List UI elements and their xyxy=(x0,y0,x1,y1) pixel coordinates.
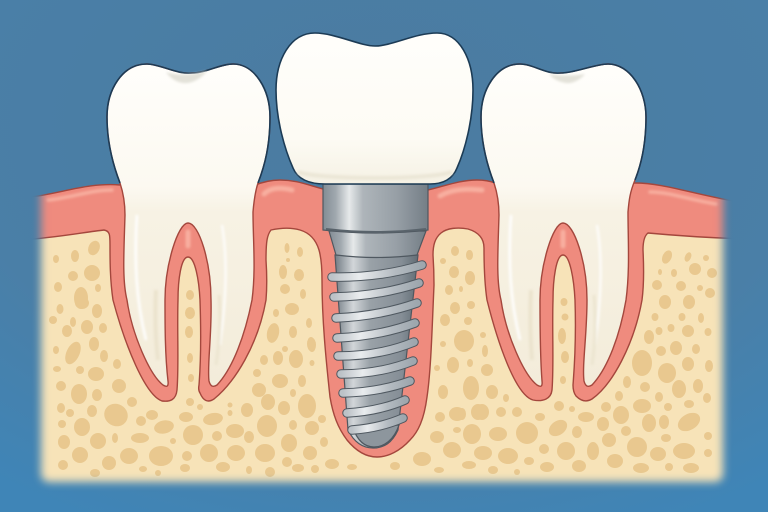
implant screw shaft xyxy=(335,255,418,448)
crown outline xyxy=(481,64,646,183)
abutment taper xyxy=(329,231,426,258)
jaw tissue: bone and gum xyxy=(20,180,750,495)
crown outline xyxy=(107,64,270,183)
bone pores xyxy=(49,239,717,477)
tooth body xyxy=(481,64,646,386)
screw threads xyxy=(332,265,422,430)
root shading xyxy=(136,215,226,365)
crown fossa xyxy=(549,74,585,83)
titanium implant xyxy=(323,184,428,448)
gum highlights xyxy=(48,188,716,246)
right natural tooth xyxy=(481,64,646,386)
crown shading xyxy=(298,172,452,178)
collar shadow xyxy=(326,229,426,232)
crown fossa xyxy=(166,71,207,83)
crown body xyxy=(276,33,473,184)
left natural tooth xyxy=(107,64,270,386)
tooth body xyxy=(107,64,270,386)
bone block xyxy=(34,228,730,489)
gum tissue xyxy=(20,180,745,457)
implant crown xyxy=(276,33,473,184)
implant tip xyxy=(353,425,399,447)
abutment collar xyxy=(323,184,428,233)
root shading xyxy=(510,215,601,365)
